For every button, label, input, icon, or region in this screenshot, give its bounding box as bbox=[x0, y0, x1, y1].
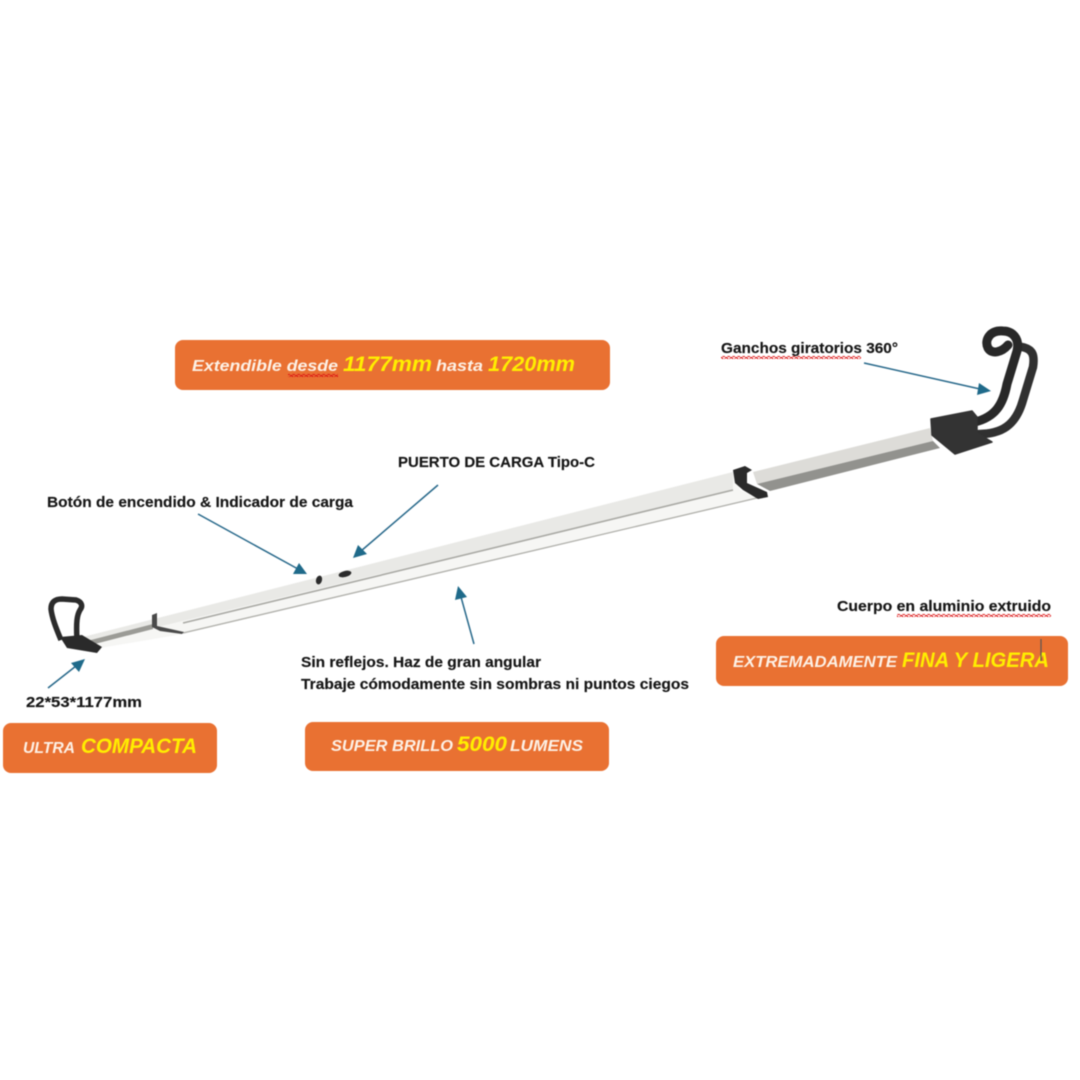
label: aluminium body: Cuerpo en aluminio extruido bbox=[837, 599, 1051, 615]
label: wide beam bbox=[301, 655, 689, 693]
pill: ultra compacta bbox=[3, 723, 217, 773]
heading pill: extendible: 1720mm bbox=[488, 353, 575, 376]
label: swivel hooks: Ganchos giratorios 360° bbox=[721, 341, 898, 357]
pill: extremadamente fina y ligera: FINA Y LIGERA bbox=[902, 649, 1049, 672]
arrow: wide beam bbox=[455, 586, 474, 644]
right swivel hooks bbox=[931, 331, 1034, 454]
arrow: power button bbox=[198, 514, 307, 574]
left hook bbox=[51, 599, 102, 653]
product: extendable light bar bbox=[51, 331, 1034, 653]
heading pill: extendible: Extendible desde bbox=[192, 358, 338, 375]
narrow extension tube bbox=[753, 428, 940, 491]
pill: ultra compacta: COMPACTA bbox=[81, 735, 197, 758]
pill: super brillo bbox=[305, 722, 609, 771]
heading pill: extendible bbox=[175, 340, 610, 390]
button and charging port bbox=[315, 570, 352, 585]
heading pill: extendible: 1177mm bbox=[343, 353, 432, 376]
arrow: charging port bbox=[353, 485, 438, 558]
pill: extremadamente fina y ligera bbox=[716, 636, 1068, 686]
label: charging port: PUERTO DE CARGA Tipo-C bbox=[398, 455, 595, 471]
middle bracket bbox=[733, 466, 768, 499]
main aluminium body bbox=[83, 472, 757, 648]
label: wide beam: Trabaje cómodamente sin sombras ni puntos ciegos bbox=[301, 677, 689, 693]
pill: super brillo: LUMENS bbox=[510, 738, 583, 755]
pill: super brillo: 5000 bbox=[457, 733, 507, 756]
arrow: dimensions bbox=[48, 659, 85, 688]
pill: extremadamente fina y ligera: EXTREMADAMENTE bbox=[733, 654, 898, 671]
label: wide beam: Sin reflejos. Haz de gran angular bbox=[301, 655, 541, 671]
left bracket bbox=[152, 613, 184, 634]
arrow: swivel hooks bbox=[864, 363, 991, 395]
label: dimensions: 22*53*1177mm bbox=[26, 695, 142, 711]
heading pill: extendible: hasta bbox=[436, 358, 483, 375]
pill: super brillo: SUPER BRILLO bbox=[331, 738, 454, 755]
label: power button: Botón de encendido & Indicador de carga bbox=[47, 495, 354, 511]
pill: ultra compacta: ULTRA bbox=[23, 740, 75, 757]
